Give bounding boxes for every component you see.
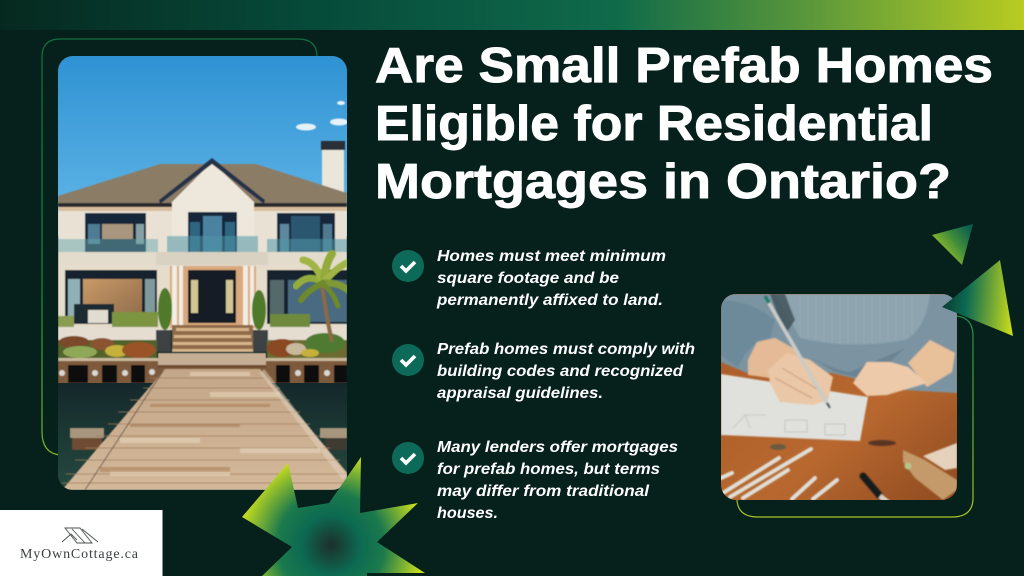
- text: bullet 2: Prefab homes must comply with: [437, 341, 695, 358]
- title: Mortgages in Ontario?: [375, 155, 951, 209]
- bullet 1: [392, 248, 666, 309]
- text: bullet 1: [436, 248, 666, 309]
- decorative small triangle: [932, 224, 973, 265]
- title: [375, 39, 993, 209]
- text: bullet 2: [437, 341, 695, 402]
- text: bullet 3: [437, 439, 678, 522]
- title: Eligible for Residential: [375, 97, 933, 151]
- palm tree: [296, 254, 350, 342]
- text: bullet 3: may differ from traditional: [437, 483, 650, 500]
- decorative starburst: [242, 457, 425, 576]
- title: Are Small Prefab Homes: [375, 39, 993, 93]
- text: bullet 1: Homes must meet minimum: [437, 248, 666, 265]
- photo: person sketching at desk: [721, 294, 957, 504]
- logo mark: roof lines: [62, 528, 98, 543]
- text: bullet 3: for prefab homes, but terms: [437, 461, 660, 478]
- logo box: [0, 510, 162, 576]
- text: bullet 3: Many lenders offer mortgages: [437, 439, 678, 456]
- photo: waterfront house: [58, 56, 350, 490]
- bullet 3: [392, 439, 678, 522]
- icon: check 2: [392, 344, 424, 376]
- top gradient bar: [0, 0, 1024, 30]
- text: bullet 2: building codes and recognized: [437, 363, 684, 380]
- decorative large triangle: [942, 260, 1013, 336]
- water: [58, 383, 347, 490]
- text: bullet 3: houses.: [437, 505, 498, 522]
- text: bullet 1: square footage and be: [437, 270, 619, 287]
- logo box: MyOwnCottage.ca: [20, 547, 139, 562]
- bullet 2: [392, 341, 695, 402]
- outline frame behind desk photo: [737, 316, 973, 517]
- outline frame behind house photo: [42, 39, 317, 455]
- text: bullet 2: appraisal guidelines.: [437, 385, 603, 402]
- icon: check 1: [392, 250, 424, 282]
- icon: check 3: [392, 442, 424, 474]
- text: bullet 1: permanently affixed to land.: [436, 292, 663, 309]
